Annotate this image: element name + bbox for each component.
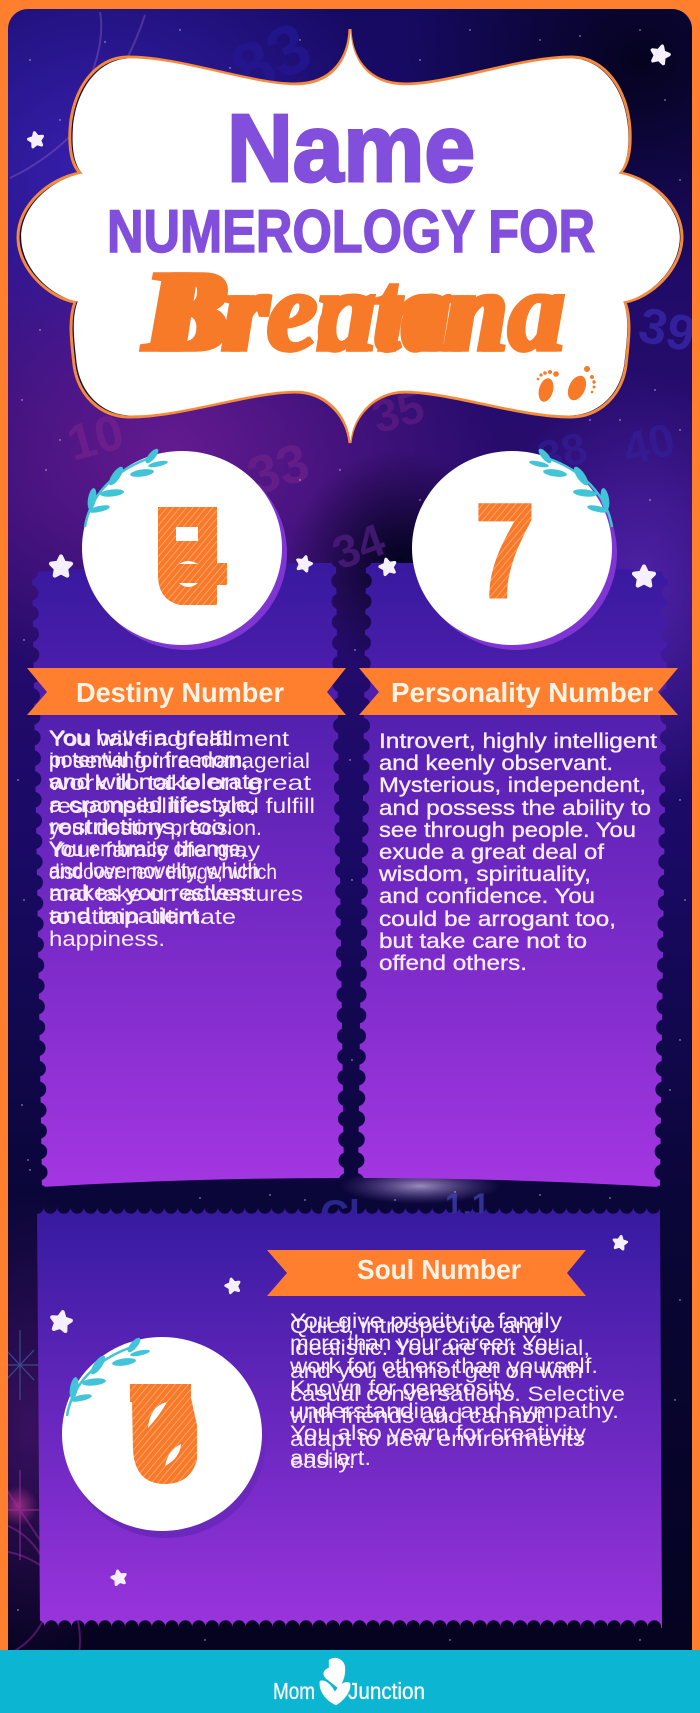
galaxy background: 39 (634, 296, 700, 363)
text: soul description: adapt to new environments (290, 1428, 585, 1451)
galaxy background: 33 (240, 432, 316, 507)
text: personality description: see through people. You (379, 819, 636, 842)
text: destiny description: happiness. (49, 928, 165, 951)
galaxy background: 83 (219, 7, 323, 110)
title: baby name script: Brentana (160, 248, 560, 376)
text: destiny description: makes you restless (49, 882, 253, 905)
galaxy background: Cl (320, 1193, 360, 1237)
panels: destiny and personality (32, 563, 668, 1187)
panel: soul (37, 1206, 662, 1628)
text: personality description: exude a great deal of (379, 841, 604, 864)
text: destiny description: and impatient. (49, 905, 206, 928)
destiny number: 4 (168, 485, 224, 628)
panel: personality (358, 563, 668, 1187)
circle: soul (62, 1336, 266, 1538)
text: personality description: Introvert, highly intelligent (379, 730, 657, 753)
text: personality description: and confidence. You (379, 885, 595, 908)
text: soul description: and art. (290, 1447, 371, 1470)
icon: baby feet (536, 366, 596, 403)
destiny number: 8 (160, 485, 216, 628)
text: soul description: casual conversations. Selective (290, 1383, 625, 1406)
text: soul description: Known for generosity, (290, 1377, 516, 1400)
ribbon: personality number: Personality Number (391, 677, 653, 708)
galaxy background: 34 (326, 513, 392, 579)
galaxy background: 38 (533, 423, 592, 483)
text: personality description: but take care not to (379, 930, 587, 953)
text: destiny description: to attain ultimate (49, 906, 236, 929)
text: destiny description: and take on adventures (49, 883, 303, 906)
galaxy background: 35 (367, 380, 429, 443)
text: personality description: and keenly observant. (379, 752, 613, 775)
destiny number: 5 (160, 485, 216, 628)
text: soul description: understanding, and sympathy. (290, 1400, 619, 1423)
text: soul description: idealistic. You are not social, (290, 1337, 590, 1360)
circle: destiny (82, 447, 287, 650)
icon: mother and heart (320, 1658, 350, 1705)
logo: MomJunction: Junction (348, 1678, 425, 1704)
galaxy background: 40 (618, 413, 680, 475)
text: soul description: work for others than yourself. (289, 1355, 598, 1378)
text: destiny description: work to take on great (48, 772, 311, 795)
text: destiny description: in serving in a managerial (49, 750, 310, 773)
text: soul description (289, 1310, 625, 1473)
text: destiny description: potential for freedom, (49, 749, 248, 772)
soul number: 6 (134, 1365, 196, 1508)
text: destiny description: a cramped lifestyle, (49, 794, 256, 817)
text: personality description: offend others. (379, 952, 527, 975)
text: destiny description: You have a great (49, 727, 229, 750)
text: destiny description: responsibilities and fulfill (49, 795, 315, 818)
text: personality description: Mysterious, independent, (379, 774, 646, 797)
title plaque (18, 29, 682, 443)
soul number: 7 (132, 1365, 192, 1508)
text: destiny description: your destiny precision. (49, 817, 262, 840)
text: personality description: wisdom, spirituality, (378, 863, 591, 886)
text: destiny description (48, 727, 315, 951)
galaxy background: 1.1 (445, 1187, 489, 1223)
icon: leaf branch (67, 1336, 150, 1416)
text: destiny description: discover new things, which (49, 861, 277, 884)
text: destiny description: Your family life may (49, 839, 261, 862)
circle: personality (412, 447, 617, 650)
title: Numerology for: NUMEROLOGY FOR (107, 198, 595, 265)
logo: MomJunction (273, 1658, 425, 1705)
text: soul description: with friends and cannot (289, 1405, 543, 1428)
text: destiny description: and will not tolerate (49, 771, 263, 794)
panel: destiny (32, 563, 344, 1187)
text: personality description: could be arrogant too, (379, 908, 616, 931)
personality number: 7 (475, 477, 535, 626)
title: baby name script: Breanna (140, 248, 566, 376)
ribbon: soul number: Soul Number (357, 1254, 521, 1285)
text: destiny description: You embrace change, (49, 838, 246, 861)
text: soul description: Quiet, introspective and (290, 1315, 542, 1338)
logo: MomJunction: Mom (273, 1678, 315, 1704)
galaxy background: 10 (61, 403, 129, 472)
ribbon: personality number (359, 668, 678, 715)
title: Name: Name (227, 95, 475, 202)
text: personality description: and possess the ability to (379, 797, 651, 820)
text: destiny description: and love novelty, which (49, 860, 259, 883)
text: destiny description: restrictions, too. (49, 816, 233, 839)
text: soul description: more than your career. You (290, 1332, 560, 1355)
footer bar (0, 1650, 700, 1713)
text: destiny description: You will find fulfilment (49, 728, 289, 751)
text: soul description: easily. (290, 1450, 355, 1473)
text: personality description (378, 730, 657, 975)
icon: leaf branch (85, 447, 168, 527)
text: soul description: and you cannot get on with (290, 1360, 583, 1383)
icon: leaf branch (529, 447, 612, 527)
ribbon: destiny number: Destiny Number (76, 677, 284, 708)
ribbon: soul number (267, 1250, 586, 1296)
text: soul description: You also yearn for creativity (290, 1422, 587, 1445)
text: soul description: You give priority to family (290, 1310, 563, 1333)
ribbon: destiny number (27, 668, 346, 715)
